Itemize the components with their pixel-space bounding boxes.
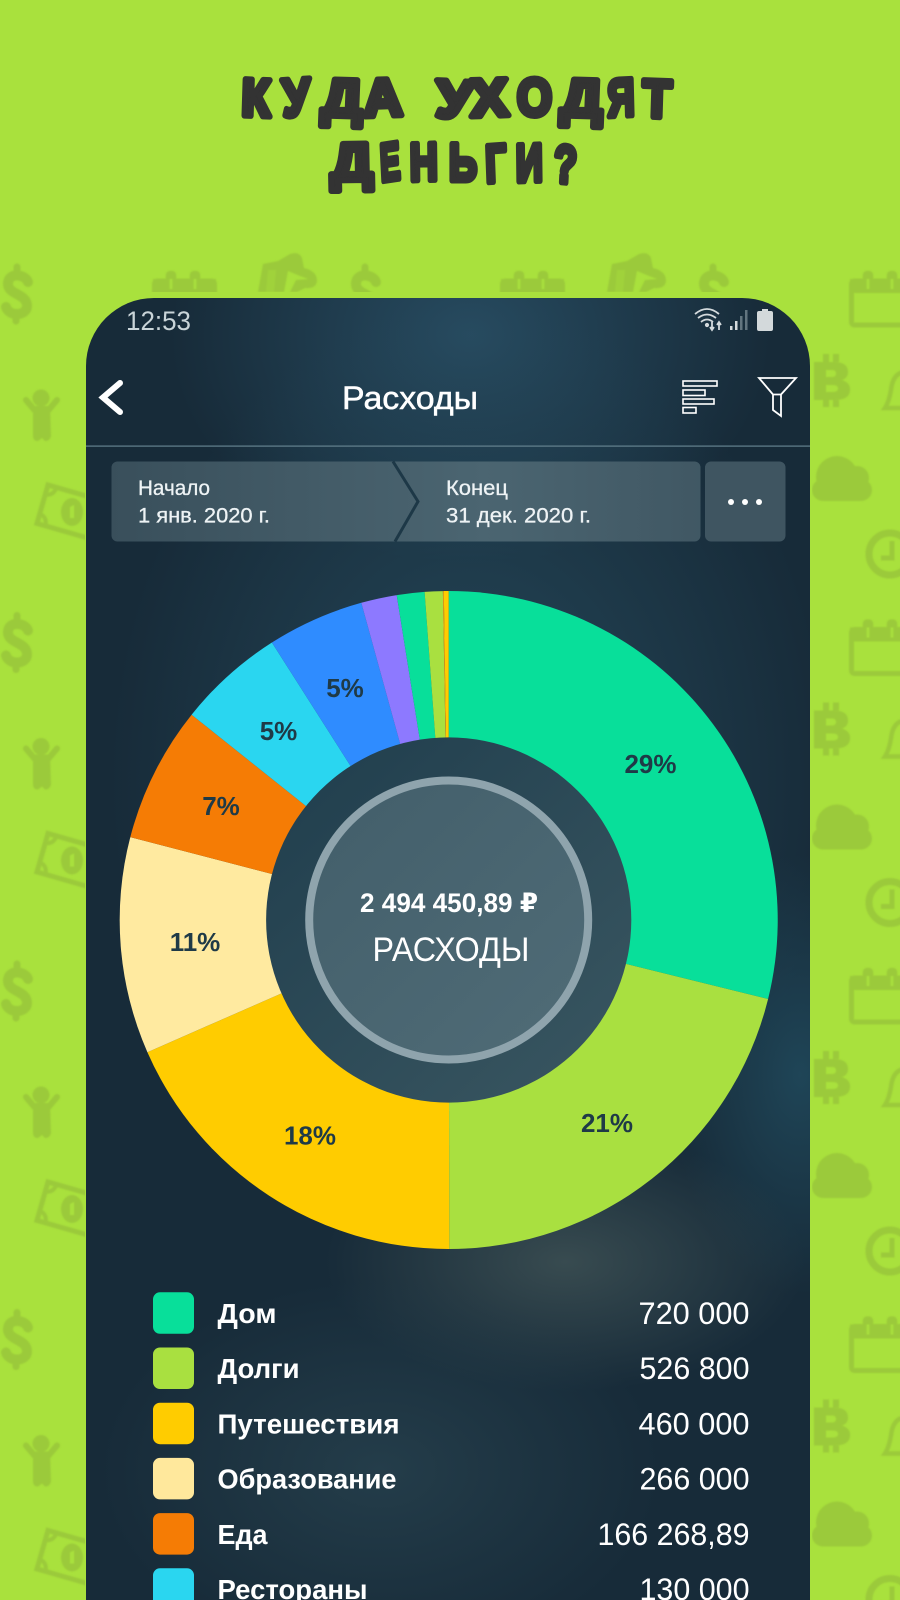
legend row: Путешествия	[153, 1403, 750, 1444]
legend row: Долги	[153, 1348, 750, 1389]
slice: thin yellow category	[444, 591, 449, 738]
legend row: Дом: 720 000	[638, 1295, 750, 1331]
slice: blue category	[272, 602, 400, 766]
header title: Расходы	[342, 380, 478, 416]
slice: Еда	[130, 714, 306, 874]
legend row: Еда: Еда	[218, 1519, 268, 1550]
legend row: Дом: Дом	[218, 1298, 276, 1329]
percentage labels: 18%	[284, 1120, 336, 1150]
slice: Путешествия	[147, 994, 450, 1249]
percentage labels: 7%	[202, 791, 240, 821]
percentage labels: 29%	[624, 749, 677, 779]
title: Д	[560, 69, 604, 129]
title: Н	[409, 133, 438, 192]
start date: 1 янв. 2020 г.	[138, 504, 270, 528]
legend row: Образование: Образование	[218, 1464, 396, 1495]
icon: sort bars	[683, 381, 717, 413]
title: Д	[321, 69, 364, 129]
legend row: Долги: 526 800	[640, 1350, 750, 1386]
total amount: 2 494 450,89 ₽	[360, 888, 538, 918]
slice: Образование	[120, 837, 282, 1052]
icon: wifi	[695, 309, 721, 330]
end date	[446, 477, 591, 528]
slice: purple category	[361, 595, 420, 744]
title	[241, 68, 673, 195]
donut chart	[120, 591, 778, 1249]
percentage labels: 21%	[581, 1108, 633, 1138]
legend	[153, 1292, 750, 1600]
legend row: Образование	[153, 1458, 750, 1499]
center circle with ring	[309, 780, 588, 1060]
title: Е	[377, 133, 402, 193]
title: И	[515, 134, 543, 193]
title: У	[281, 68, 312, 128]
title: Д	[330, 133, 373, 192]
title: Х	[469, 68, 509, 128]
start date	[140, 480, 268, 523]
slice: Долги	[449, 964, 768, 1249]
end date: 31 дек. 2020 г.	[446, 504, 591, 528]
legend row: Долги: Долги	[218, 1353, 300, 1384]
start date: Начало	[138, 477, 210, 500]
donut hole	[266, 737, 631, 1103]
percentage labels	[170, 673, 677, 1150]
slice: lime category	[424, 591, 446, 738]
total label: РАСХОДЫ	[372, 931, 530, 969]
icon: signal bars	[730, 310, 748, 330]
title: Ь	[449, 134, 477, 192]
title: А	[362, 68, 403, 128]
legend row: Еда	[153, 1513, 750, 1555]
title: Т	[642, 70, 673, 130]
title: У	[434, 70, 476, 130]
legend row: Еда: 166 268,89	[598, 1516, 750, 1552]
slice: Дом	[449, 591, 778, 999]
percentage labels: 5%	[260, 716, 297, 746]
title: Я	[606, 69, 635, 128]
icon: battery	[757, 309, 773, 331]
status bar clock: 12:53	[126, 306, 191, 336]
percentage labels: 5%	[326, 673, 364, 703]
slice: Рестораны	[192, 642, 350, 806]
title: О	[517, 68, 552, 128]
percentage labels: 11%	[170, 927, 220, 957]
slice: thin orange category	[442, 591, 446, 738]
slice: green category	[396, 592, 436, 740]
title: К	[241, 69, 272, 129]
legend row: Дом	[153, 1292, 750, 1334]
title: ?	[552, 135, 579, 195]
more options button	[705, 462, 786, 542]
legend row: Рестораны	[153, 1568, 750, 1600]
legend row: Путешествия: 460 000	[638, 1405, 750, 1441]
title: Г	[484, 134, 508, 194]
icon: back arrow	[103, 383, 120, 412]
panel: phone screen	[86, 298, 810, 1600]
date range panel	[112, 462, 700, 542]
end date: Конец	[446, 477, 508, 500]
legend row: Путешествия: Путешествия	[218, 1408, 400, 1439]
legend row: Образование: 266 000	[640, 1461, 750, 1497]
icon: filter funnel	[759, 378, 796, 416]
